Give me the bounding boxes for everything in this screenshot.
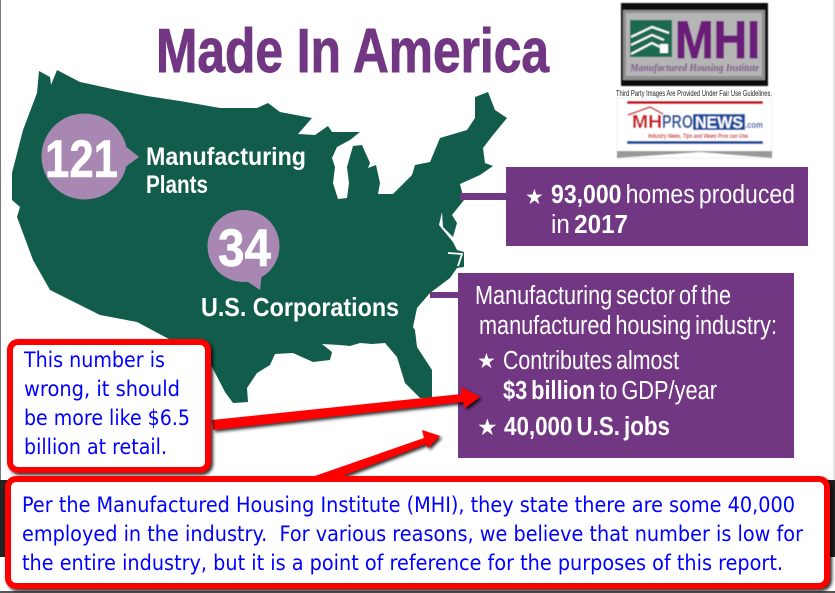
panel: manufacturing sector: manufactured housing industry:	[479, 312, 777, 340]
panel: manufacturing sector: ★	[477, 414, 498, 440]
logo: MHProNews: Industry News, Tips and Views Pros can Use.	[648, 134, 749, 140]
panel: manufacturing sector: 40,000 U.S. jobs	[504, 413, 670, 441]
panel: homes produced: 93,000 homes produced	[551, 181, 795, 209]
panel: manufacturing sector: $3 billion to GDP/year	[503, 377, 717, 405]
callout: MHI employment note	[8, 479, 827, 586]
panel: manufacturing sector	[430, 273, 794, 458]
panel: manufacturing sector: Contributes almost	[503, 347, 679, 375]
arrow: to $3 billion	[212, 387, 480, 430]
stat bubble: 121 manufacturing plants: 121	[45, 130, 118, 189]
callout: number is wrong	[10, 342, 208, 470]
callout: number is wrong: This number is	[23, 348, 165, 373]
panel: manufacturing sector: Manufacturing sector of the	[475, 282, 731, 310]
panel: manufacturing sector: ★	[477, 350, 496, 373]
logo: MHProNews: .com	[745, 120, 763, 130]
arrow: to 40,000 jobs	[312, 430, 440, 477]
callout: number is wrong: billion at retail.	[24, 435, 167, 460]
stat bubble: 121 manufacturing plants	[42, 114, 306, 200]
logo: MHProNews: MH	[632, 112, 662, 132]
stat bubble: 34 U.S. corporations	[201, 210, 399, 322]
callout: number is wrong: wrong, it should	[24, 377, 180, 402]
title: Made In America	[156, 17, 549, 86]
panel: homes produced: in 2017	[551, 211, 628, 239]
callout: number is wrong: be more like $6.5	[24, 406, 190, 431]
stat bubble: 121 manufacturing plants: Plants	[146, 171, 208, 199]
panel: homes produced	[460, 167, 808, 246]
logo: MHI	[621, 3, 768, 86]
logo: MHProNews: PRO	[662, 112, 693, 132]
US map	[12, 70, 507, 403]
logo: MHProNews	[617, 98, 772, 158]
logo: MHProNews: NEWS	[695, 113, 743, 132]
stat bubble: 34 U.S. corporations: U.S. Corporations	[201, 292, 399, 322]
fair use note: Third Party Images Are Provided Under Fair Use Guidelines.	[616, 89, 772, 98]
logo: MHI: Manufactured Housing Institute	[629, 63, 760, 74]
stat bubble: 121 manufacturing plants: Manufacturing	[146, 143, 306, 171]
panel: homes produced: ★	[525, 186, 544, 209]
logo: MHI: MHI	[675, 11, 760, 70]
stat bubble: 34 U.S. corporations: 34	[218, 219, 271, 278]
